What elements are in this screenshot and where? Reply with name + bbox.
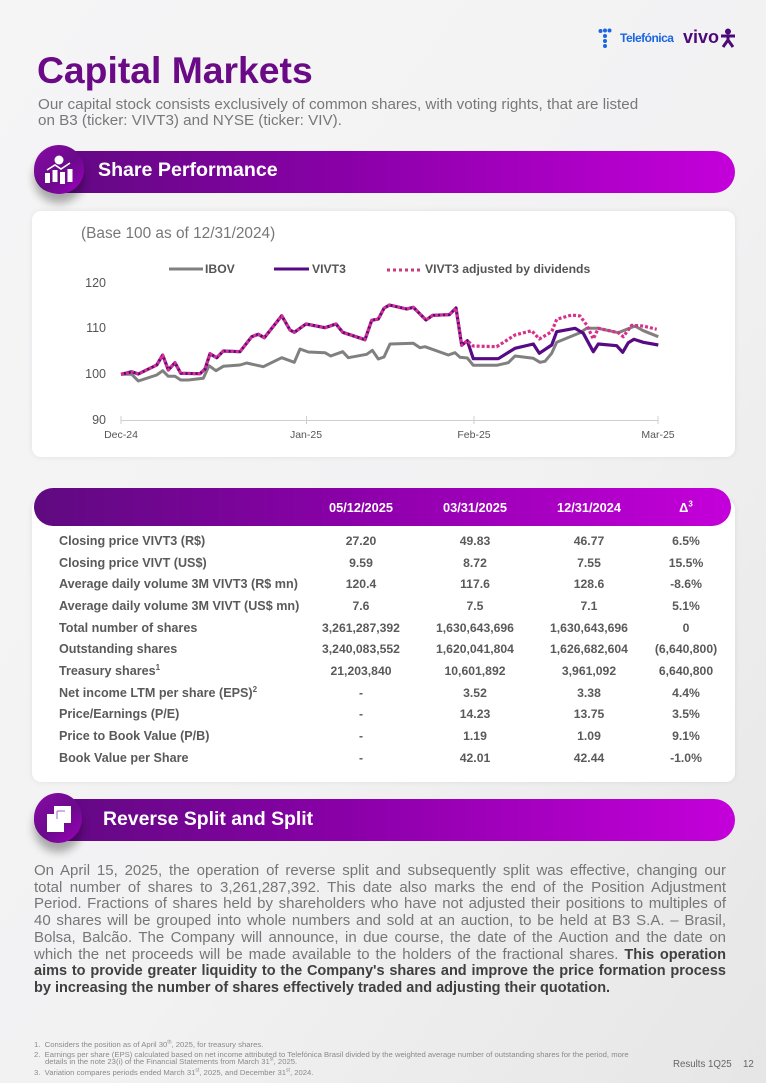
body text: reverse split explanation [34,862,726,996]
body text: reverse split explanation: Period. Fractions of shares held by shareholders who have not adjusted their positions to multiples of [34,895,726,912]
footnotes: 2. Earnings per share (EPS) calculated based on net income attributed to Telefónica Brasil divided by the weighted average number of outstanding shares for the period, more [34,1050,629,1059]
table rows: 6.5% [672,534,700,548]
body text: reverse split explanation: Bolsa, Balcão. The Company will announce, in due course, the date of the Auction and the date on [34,929,726,946]
logo text: Telefónica: Telefónica [620,31,673,45]
heading: Reverse Split and Split: Reverse Split and Split [103,808,313,830]
table rows: 7.5 [467,599,483,613]
footnotes [34,1039,629,1077]
table rows: - [359,686,363,700]
page footer: 12 [743,1059,754,1070]
icon: overlapping squares [34,793,82,843]
series: VIVT3 adjusted by dividends [121,305,657,374]
table rows: 7.1 [581,599,597,613]
table rows: Average daily volume 3M VIVT3 (R$ mn) [59,577,298,591]
table rows: 42.01 [460,751,490,765]
body text: reverse split explanation: 40 shares will be grouped into whole numbers and sold at an auction, to be held at B3 S.A. – Brasil, [34,912,726,929]
table header labels [329,500,693,515]
footnotes: 3. Variation compares periods ended March 31st, 2025, and December 31st, 2024. [34,1067,313,1077]
table rows: 1,630,643,696 [550,621,628,635]
table rows [59,534,717,765]
banner: Share Performance [34,151,735,193]
table rows: 46.77 [574,534,604,548]
table rows: 5.1% [672,599,700,613]
series: IBOV [121,326,658,381]
x axis labels: Mar-25 [641,429,675,441]
icon: Telefónica dotted T [598,28,612,48]
page footer: Results 1Q25 [673,1059,732,1070]
y axis labels [85,276,106,427]
table rows: Treasury shares1 [59,663,160,678]
x axis labels: Jan-25 [290,429,322,441]
table header labels: 12/31/2024 [557,500,621,515]
x axis labels [104,429,675,441]
body text: reverse split explanation: which the net proceeds will be made available to the holders of the fractional shares. This operation [34,946,726,962]
table rows: 117.6 [460,577,490,591]
table rows: 15.5% [669,556,703,570]
table rows: Net income LTM per share (EPS)2 [59,684,257,700]
y axis labels: 100 [85,367,106,381]
icon: share performance [34,145,84,194]
table header labels: 03/31/2025 [443,500,507,515]
intro text: Our capital stock consists exclusively of common shares, with voting rights, that are listed [38,96,638,113]
table rows: 4.4% [672,686,700,700]
table rows: -8.6% [670,577,702,591]
panel: table card [32,500,735,782]
table rows: Book Value per Share [59,751,188,765]
table rows: 10,601,892 [444,664,506,678]
legend: IBOV [205,262,236,276]
legend [169,262,590,276]
legend: VIVT3 adjusted by dividends [425,262,590,276]
table rows: 1,630,643,696 [436,621,514,635]
table rows: Price/Earnings (P/E) [59,707,179,721]
table rows: - [359,751,363,765]
panel: chart card [32,211,735,457]
body text: reverse split explanation: aims to provide greater liquidity to the Company's shares and improve the price formation process [34,963,726,979]
table rows: 27.20 [346,534,376,548]
table rows: 1,620,041,804 [436,642,514,656]
table rows: (6,640,800) [655,642,717,656]
heading: Share Performance: Share Performance [98,159,278,181]
table rows: Price to Book Value (P/B) [59,729,209,743]
x axis [121,416,658,424]
table header labels: Δ3 [679,500,693,515]
table rows: - [359,729,363,743]
table rows: 1,626,682,604 [550,642,628,656]
legend: VIVT3 [312,262,346,276]
footnotes: 1. Considers the position as of April 30th, 2025, for treasury shares. [34,1039,263,1049]
body text: reverse split explanation: total number of shares to 3,261,287,392. This date also marks the end of the Position Adjustment [34,879,726,896]
table rows: 128.6 [574,577,604,591]
chart subtitle: (Base 100 as of 12/31/2024) [81,225,275,242]
table rows: 8.72 [463,556,487,570]
table rows: 7.6 [353,599,369,613]
table rows: Closing price VIVT3 (R$) [59,534,205,548]
line chart: Base 100 share performance [81,225,675,441]
table rows: -1.0% [670,751,702,765]
table rows: Average daily volume 3M VIVT (US$ mn) [59,599,299,613]
table rows: 3,961,092 [562,664,616,678]
table rows: Total number of shares [59,621,197,635]
table rows: 6,640,800 [659,664,713,678]
table header bar [34,488,731,526]
icon: vivo figure [721,28,735,48]
table rows: 3,261,287,392 [322,621,400,635]
table rows: 120.4 [346,577,376,591]
table rows: 21,203,840 [330,664,392,678]
table rows: 13.75 [574,707,604,721]
title: Capital Markets [37,49,313,91]
x axis labels: Dec-24 [104,429,138,441]
logo text: vivo: vivo [683,27,719,47]
series: VIVT3 [121,305,658,374]
banner: Reverse Split and Split [34,799,735,841]
body text: reverse split explanation: by increasing the number of shares effectively traded and adjusting their quotation. [34,980,610,996]
table header labels: 05/12/2025 [329,500,393,515]
table rows: 0 [683,621,689,635]
table rows: Closing price VIVT (US$) [59,556,207,570]
table rows: 49.83 [460,534,490,548]
table rows: 3.5% [672,707,700,721]
x axis labels: Feb-25 [457,429,491,441]
table rows: 3.38 [577,686,601,700]
table rows: - [359,707,363,721]
y axis labels: 90 [92,413,106,427]
body text: reverse split explanation: On April 15, 2025, the operation of reverse split and subsequently split was effective, changing our [34,862,726,879]
table rows: 3.52 [463,686,487,700]
table rows: 3,240,083,552 [322,642,400,656]
y axis labels: 110 [86,321,106,335]
table rows: 9.59 [349,556,373,570]
table rows: 9.1% [672,729,700,743]
table rows: 1.19 [463,729,487,743]
table rows: Outstanding shares [59,642,177,656]
intro text [38,96,638,129]
table rows: 42.44 [574,751,604,765]
table rows: 7.55 [577,556,601,570]
logo: Telefónica and vivo [598,27,735,48]
intro text: on B3 (ticker: VIVT3) and NYSE (ticker: VIV). [38,112,342,129]
table rows: 1.09 [577,729,601,743]
y axis labels: 120 [85,276,106,290]
footnotes: details in the note 23(i) of the Financial Statements from March 31st, 2025. [45,1056,297,1066]
table rows: 14.23 [460,707,490,721]
